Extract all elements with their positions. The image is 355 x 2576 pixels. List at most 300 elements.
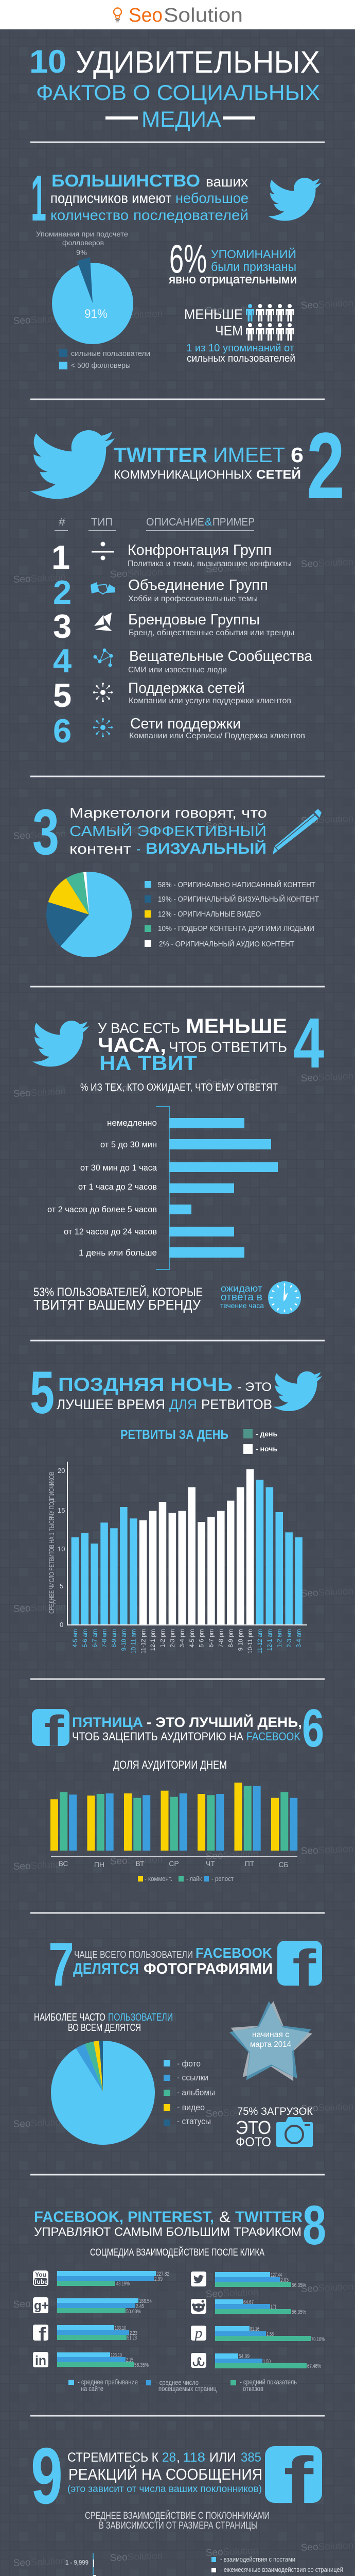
header logo band	[0, 0, 355, 29]
watermarks: SeoSolution	[13, 2117, 66, 2130]
number 9: 9	[31, 2431, 63, 2520]
row: twitter: 2.03	[280, 2277, 289, 2283]
pie legend: 19% - ОРИГИНАЛЬНЫЙ ВИЗУАЛЬНЫЙ КОНТЕНТ	[158, 894, 319, 904]
pie chart title	[36, 230, 128, 257]
icon: network	[94, 648, 113, 667]
title: МЕДИА	[141, 107, 221, 132]
row 3: Брендовые Группы	[128, 612, 260, 628]
icon: twitter bird	[273, 1371, 322, 1411]
row 3	[53, 607, 294, 645]
watermarks: SeoSolution	[300, 814, 354, 826]
bar chart: audience by weekday: СБ	[278, 1860, 289, 1869]
row: stumbleupon: 1.50	[263, 2359, 271, 2365]
heading: ЧТОБ ОТВЕТИТЬ	[169, 1039, 287, 1056]
pie legend: - ссылки	[177, 2073, 208, 2082]
bar chart: retweets by hour: 4-5 pm	[189, 1629, 196, 1648]
star badge	[228, 1999, 314, 2082]
row: reddit: 56.35%	[292, 2309, 306, 2315]
heading: &	[219, 2209, 230, 2226]
stat: 6%: явно отрицательными	[169, 273, 297, 286]
icon: youtube: You	[35, 2271, 46, 2278]
bar chart: retweets by hour: 3-4 pm	[180, 1629, 186, 1648]
heading: ЧАЩЕ ВСЕГО ПОЛЬЗОВАТЕЛИ	[74, 1950, 193, 1960]
pie legend: сильные пользователи	[71, 349, 150, 358]
icon: reddit	[191, 2299, 206, 2314]
bar chart: retweets by hour: 6-7 pm	[209, 1629, 215, 1648]
row 1: 1	[51, 538, 70, 576]
row: facebook: 51.28	[127, 2335, 137, 2341]
stat: fewer than 1 in 10: сильных пользователей	[187, 353, 295, 364]
watermarks: SeoSolution	[13, 2297, 66, 2310]
table header	[55, 516, 255, 531]
icon: logo bulb	[114, 8, 121, 22]
watermarks: SeoSolution	[110, 2551, 163, 2564]
icon: twitter bird	[32, 1021, 89, 1066]
heading: ваших	[206, 174, 248, 190]
icon: facebook small: f	[39, 2324, 46, 2345]
chart title: ДОЛЯ АУДИТОРИИ ДНЕМ	[113, 1758, 227, 1771]
watermarks: SeoSolution	[13, 2556, 66, 2569]
chart legend: - средний показатель	[240, 2378, 297, 2386]
section 3: visual content	[32, 796, 322, 957]
row 5: Поддержка сетей	[128, 680, 245, 697]
watermarks: SeoSolution	[205, 2287, 259, 2300]
icon: clock	[268, 1281, 301, 1314]
pie chart: content types	[46, 872, 132, 957]
stat: 75%: 75% ЗАГРУЗОК	[237, 2106, 313, 2117]
chart legend: - коммент.	[145, 1875, 172, 1883]
stat: 75%: ЭТО	[236, 2117, 271, 2138]
heading: - ЭТО ЛУЧШИЙ ДЕНЬ,	[147, 1714, 302, 1730]
watermarks: SeoSolution	[13, 572, 66, 585]
chart legend	[211, 2555, 343, 2573]
heading	[69, 805, 267, 857]
bar chart: retweets by hour: 20	[58, 1467, 65, 1475]
row: pinterest: 70.16%	[311, 2336, 325, 2343]
stat: 6%	[169, 236, 297, 286]
heading: FACEBOOK	[246, 1730, 300, 1743]
table header: ОПИСАНИЕ	[146, 516, 204, 528]
icon: facebook: f	[283, 2444, 314, 2517]
watermarks: SeoSolution	[300, 2102, 354, 2114]
bar chart: retweets by hour: 6-7 am	[92, 1629, 98, 1648]
row 5: 5	[53, 676, 72, 714]
heading: КОММУНИКАЦИОННЫХ	[114, 468, 252, 481]
title: УДИВИТЕЛЬНЫХ	[76, 45, 320, 79]
chart legend: на сайте	[81, 2384, 103, 2393]
chart legend	[138, 1875, 234, 1883]
chart legend: отказов	[243, 2384, 263, 2393]
icon: linkedin	[33, 2352, 48, 2368]
icon: pinterest small	[191, 2325, 206, 2342]
icon: youtube	[33, 2270, 48, 2286]
watermarks: SeoSolution	[300, 2282, 354, 2295]
heading: САМЫЙ ЭФФЕКТИВНЫЙ	[69, 822, 267, 840]
heading: У ВАС ЕСТЬ	[98, 1020, 180, 1036]
bar chart: expected reply time: от 5 до 30 мин	[100, 1140, 157, 1149]
bar chart: retweets by hour: 11-12 pm	[140, 1629, 147, 1654]
pie legend: 58% - ОРИГИНАЛЬНО НАПИСАННЫЙ КОНТЕНТ	[158, 880, 315, 889]
pie chart title: Упоминания при подсчете	[36, 230, 128, 238]
logo wordmark: Solution	[164, 5, 243, 26]
table header: ТИП	[91, 516, 113, 528]
watermarks: SeoSolution	[205, 1849, 259, 1862]
bar chart: expected reply time: немедленно	[107, 1118, 157, 1128]
heading: НА ТВИТ	[99, 1052, 197, 1075]
row 4	[53, 642, 313, 680]
heading	[67, 2450, 262, 2495]
pie title: ПОЛЬЗОВАТЕЛИ	[108, 2012, 173, 2023]
bar chart: audience by weekday: ВТ	[136, 1859, 145, 1868]
watermarks: SeoSolution	[205, 303, 259, 316]
bar chart: retweets by hour: 8-9 pm	[228, 1629, 234, 1648]
number 4: 4	[293, 1004, 324, 1083]
heading	[73, 1945, 273, 1977]
pie chart: mentions: 91%	[84, 307, 108, 321]
row: pinterest: 1.58	[267, 2331, 274, 2337]
pie legend	[59, 349, 150, 370]
stat: 53%	[33, 1283, 264, 1313]
heading: ЧАСА,	[98, 1034, 166, 1057]
chart legend: - взаимодействия с постами	[220, 2555, 295, 2563]
stat: fewer than 1 in 10: МЕНЬШЕ	[184, 307, 243, 322]
bar chart: engagement by page size	[41, 2553, 315, 2576]
bar chart: retweets by hour: СРЕДНЕЕ ЧИСЛО РЕТВИТОВ НА 1 ТЫСЯЧУ ПОДПИСЧИКОВ	[47, 1472, 56, 1614]
bar chart: retweets by hour: 1-2 am	[277, 1629, 283, 1648]
title	[29, 44, 320, 132]
stat: 6%: 6%	[169, 236, 207, 281]
heading: ФОТОГРАФИЯМИ	[144, 1960, 273, 1977]
stat: fewer than 1 in 10: 1 из 10 упоминаний от	[186, 343, 294, 354]
section 5: late night	[30, 1359, 322, 1654]
heading: количество	[50, 207, 129, 223]
watermarks: SeoSolution	[13, 1859, 66, 1872]
bar chart: retweets by hour: 2-3 am	[287, 1629, 293, 1648]
heading: FACEBOOK,	[34, 2209, 123, 2226]
icon: handshake	[91, 582, 115, 594]
bar chart: retweets by hour: 10	[58, 1545, 65, 1553]
heading: ПОЗДНЯЯ НОЧЬ	[58, 1374, 233, 1395]
bar chart: audience by weekday	[50, 1783, 297, 1869]
pie legend: - видео	[177, 2103, 205, 2112]
row: pinterest: 81.16	[250, 2326, 259, 2332]
chart title: СРЕДНЕЕ ВЗАИМОДЕЙСТВИЕ С ПОКЛОННИКАМИ	[85, 2510, 270, 2521]
icon: facebook: f	[292, 1939, 316, 1997]
heading: ,	[176, 2450, 180, 2465]
icon: facebook small	[33, 2324, 48, 2345]
row: google plus: 2.45	[136, 2303, 144, 2310]
bar chart: retweets by hour: 1-2 pm	[160, 1629, 166, 1648]
row 2	[53, 573, 268, 611]
icon: twitter bird	[268, 178, 321, 221]
heading: контент	[69, 841, 131, 857]
watermarks: SeoSolution	[110, 567, 163, 580]
row: linkedin: 56.35%	[134, 2362, 149, 2368]
watermarks: SeoSolution	[300, 557, 354, 570]
chart title: % ИЗ ТЕХ, КТО ОЖИДАЕТ, ЧТО ЕМУ ОТВЕТЯТ	[80, 1082, 278, 1093]
heading: PINTEREST,	[128, 2209, 214, 2226]
bar chart: audience by weekday: ЧТ	[206, 1859, 215, 1868]
watermarks: SeoSolution	[110, 309, 163, 321]
chart title	[85, 2510, 270, 2531]
row: facebook: 2.23	[130, 2330, 137, 2336]
icon: radial blue	[93, 718, 113, 737]
heading	[50, 171, 248, 223]
heading: 28	[162, 2450, 176, 2465]
icon: people	[246, 304, 294, 341]
watermarks: SeoSolution	[205, 1076, 259, 1089]
stat: 53%: течение часа	[220, 1301, 264, 1310]
icon: google plus: g+	[34, 2299, 49, 2313]
section 2: six networks	[30, 413, 345, 750]
stat: fewer than 1 in 10: ЧЕМ	[215, 323, 243, 338]
watermarks: SeoSolution	[13, 1087, 66, 1099]
heading: TWITTER	[235, 2209, 303, 2226]
heading: 385	[241, 2450, 261, 2465]
stat: 53%: 53% ПОЛЬЗОВАТЕЛЕЙ, КОТОРЫЕ	[33, 1285, 203, 1299]
bar chart: retweets by hour: 5-6 am	[82, 1629, 88, 1648]
heading: СЕТЕЙ	[256, 467, 301, 482]
chart title: РЕТВИТЫ ЗА ДЕНЬ	[120, 1428, 228, 1442]
row: stumbleupon: 54.09	[239, 2353, 250, 2360]
number 5: 5	[30, 1359, 55, 1426]
title: ФАКТОВ О СОЦИАЛЬНЫХ	[36, 80, 320, 105]
pie legend: 12% - ОРИГИНАЛЬНЫЕ ВИДЕО	[158, 910, 261, 919]
title: 10	[29, 44, 66, 80]
row 2: Хобби и профессиональные темы	[128, 595, 258, 603]
stat: 53%: ответа в	[221, 1292, 262, 1303]
pie legend: < 500 фолловеры	[71, 361, 131, 370]
bar chart: retweets by hour: 10-11 pm	[247, 1629, 254, 1654]
watermarks: SeoSolution	[300, 298, 354, 311]
heading: ДЕЛЯТСЯ	[73, 1960, 139, 1977]
row 5	[53, 676, 291, 714]
bar chart: expected reply time: от 12 часов до 24 часов	[64, 1227, 157, 1236]
heading: TWITTER	[114, 443, 207, 467]
stat: 75%: ФОТО	[236, 2135, 271, 2149]
bar chart: engagement by page size: 1 - 9,999	[65, 2558, 88, 2566]
row 1: Конфронтация Групп	[128, 542, 272, 558]
heading: ПЯТНИЦА	[72, 1715, 143, 1730]
row: twitter: 56.35%	[292, 2282, 306, 2289]
watermarks: SeoSolution	[205, 2107, 259, 2120]
row 6: Компании или Сервисы/ Поддержка клиентов	[129, 732, 305, 740]
row: google plus	[33, 2297, 152, 2315]
logo wordmark: Seo	[129, 5, 163, 26]
chart legend: - ночь	[256, 1445, 277, 1453]
bar chart: retweets by hour: 9-10 pm	[238, 1629, 244, 1651]
row 6: Сети поддержки	[130, 716, 241, 732]
icon: linkedin: in	[35, 2353, 46, 2368]
row 2: Объединение Групп	[128, 577, 268, 594]
heading: 118	[183, 2450, 205, 2465]
heading: (это зависит от числа ваших поклонников)	[67, 2484, 262, 2495]
heading: последователей	[133, 207, 248, 223]
bar chart: retweets by hour: 12-1 am	[267, 1629, 273, 1651]
icon: radial	[93, 683, 113, 702]
pie title: ВО ВСЕМ ДЕЛЯТСЯ	[68, 2022, 141, 2033]
bar chart: retweets by hour: 2-3 pm	[170, 1629, 176, 1648]
pie title	[34, 2012, 173, 2033]
row 1	[51, 538, 292, 576]
watermarks: SeoSolution	[300, 1586, 354, 1599]
bar chart: retweets by hour: 7-8 am	[102, 1629, 108, 1648]
chart legend: - день	[256, 1430, 277, 1438]
watermarks: SeoSolution	[300, 2540, 354, 2553]
bar chart: retweets by hour: 8-9 am	[112, 1629, 118, 1648]
heading: ИМЕЕТ	[213, 443, 285, 467]
heading: Маркетологи говорят, что	[69, 805, 267, 821]
table header: &	[205, 516, 212, 528]
heading: - ЭТО	[237, 1380, 272, 1394]
watermarks: SeoSolution	[110, 1081, 163, 1094]
watermarks: SeoSolution	[13, 829, 66, 842]
heading	[34, 2209, 303, 2239]
bar chart: retweets by hour: 15	[58, 1506, 65, 1514]
stat: 75%	[236, 2106, 313, 2149]
pie chart: shared content	[51, 2041, 155, 2145]
row: facebook: 133.10	[115, 2325, 126, 2331]
bar chart: retweets by hour: 4-5 am	[73, 1629, 79, 1648]
row: linkedin: 123.10	[111, 2352, 122, 2359]
chart legend: - среднее пребывание	[78, 2378, 138, 2386]
pie legend: 10% - ПОДБОР КОНТЕНТА ДРУГИМИ ЛЮДЬМИ	[158, 924, 314, 933]
row: youtube: 43.19%	[116, 2281, 130, 2287]
bar chart: retweets by hour: 5	[60, 1582, 63, 1590]
chart title: В ЗАВИСИМОСТИ ОТ РАЗМЕРА СТРАНИЦЫ	[99, 2520, 258, 2531]
icon: youtube: Tube	[33, 2278, 48, 2285]
section 7: photos	[34, 1930, 322, 2149]
bar chart: retweets by hour: 0	[60, 1621, 63, 1629]
logo wordmark	[129, 5, 243, 26]
row 5: Компании или услуги поддержки клиентов	[129, 697, 291, 705]
heading	[57, 1374, 272, 1412]
bar chart: retweets by hour: 3-4 am	[296, 1629, 303, 1648]
watermarks: SeoSolution	[205, 819, 259, 832]
bar chart: expected reply time: от 1 часа до 2 часов	[78, 1182, 157, 1192]
icon: facebook	[32, 1709, 69, 1746]
watermarks: SeoSolution	[13, 1602, 66, 1615]
bar chart: retweets by hour: 5-6 pm	[199, 1629, 205, 1648]
icon: triangles	[94, 613, 112, 631]
number 3: 3	[32, 796, 59, 868]
row: youtube: 2.99	[154, 2276, 163, 2282]
icon: camera	[276, 2117, 313, 2147]
row 4: СМИ или известные люди	[128, 666, 227, 674]
chart legend	[243, 1429, 277, 1454]
heading: МЕНЬШЕ	[186, 1015, 287, 1038]
stat: 53%: ТВИТЯТ ВАШЕМУ БРЕНДУ	[33, 1297, 201, 1313]
bar chart: expected reply time: от 2 часов до более 5 часов	[47, 1205, 157, 1214]
icon: twitter small	[191, 2272, 206, 2286]
bar chart: retweets by hour	[47, 1462, 307, 1654]
heading: РЕАКЦИЙ НА СООБЩЕНИЯ	[68, 2465, 262, 2483]
watermarks: SeoSolution	[300, 1071, 354, 1084]
bar chart: retweets by hour: 7-8 pm	[218, 1629, 224, 1648]
heading: 6	[291, 443, 304, 467]
pie legend: - альбомы	[177, 2088, 215, 2097]
row: reddit: 64.67	[243, 2299, 254, 2306]
icon: twitter bird large	[30, 430, 115, 499]
row 4: 4	[53, 642, 72, 680]
chart legend: посещаемых страниц	[158, 2384, 217, 2393]
pie title: НАИБОЛЕЕ ЧАСТО	[34, 2012, 105, 2023]
icon: facebook: f	[44, 1707, 64, 1755]
row: twitter	[191, 2272, 306, 2289]
row 1: Политика и темы, вызывающие конфликты	[128, 560, 292, 568]
watermarks: SeoSolution	[110, 824, 163, 837]
bar chart: expected reply time	[47, 1107, 278, 1269]
chart legend	[68, 2378, 297, 2393]
heading: БОЛЬШИНСТВО	[51, 171, 200, 190]
row: youtube: 227.82	[156, 2271, 169, 2277]
pie chart title: 9%	[76, 248, 87, 257]
row: linkedin	[33, 2352, 149, 2368]
heading	[98, 1015, 287, 1075]
heading: УПРАВЛЯЮТ САМЫМ БОЛЬШИМ ТРАФИКОМ	[34, 2225, 301, 2239]
pie legend: - статусы	[177, 2116, 211, 2126]
row 3: 3	[53, 607, 72, 645]
bar chart: retweets by hour: 12-1 pm	[150, 1629, 156, 1651]
section 9: reactions	[33, 2446, 343, 2576]
number 6: 6	[302, 1699, 324, 1758]
section 1: most followers	[31, 162, 321, 370]
heading: -	[136, 841, 140, 857]
star badge: начиная с	[252, 2030, 289, 2039]
heading: ДЛЯ	[169, 1397, 197, 1412]
icon: facebook	[277, 1941, 322, 1986]
bar chart: audience by weekday: ПН	[94, 1860, 104, 1869]
bar chart: retweets by hour: 10-11 am	[131, 1629, 137, 1654]
watermarks: SeoSolution	[205, 2546, 259, 2558]
table header: #	[59, 516, 65, 528]
row: pinterest	[191, 2325, 325, 2343]
icon: divide	[92, 542, 114, 561]
number 7: 7	[48, 1930, 74, 1999]
heading: РЕТВИТОВ	[201, 1397, 272, 1412]
heading: ЛУЧШЕЕ ВРЕМЯ	[57, 1397, 165, 1412]
row: reddit	[191, 2299, 306, 2315]
heading: подписчиков имеют	[50, 190, 171, 206]
row: twitter: 127.44	[271, 2272, 282, 2278]
pie legend	[145, 880, 319, 948]
row: reddit: 1.71	[271, 2304, 276, 2310]
heading	[72, 1714, 302, 1743]
icon: pinterest small: p	[193, 2325, 203, 2342]
row 6: 6	[53, 712, 72, 750]
bar chart: expected reply time: от 30 мин до 1 часа	[80, 1163, 157, 1173]
pie chart: mentions	[52, 257, 133, 344]
row 4: Вещательные Сообщества	[129, 648, 313, 665]
watermarks: SeoSolution	[205, 562, 259, 575]
section 4: reply within the hour	[32, 1004, 324, 1314]
row: facebook	[33, 2324, 137, 2345]
bar chart: audience by weekday: СР	[169, 1859, 179, 1868]
row: google plus: 50.63%	[126, 2309, 141, 2315]
icon: pencil	[273, 809, 322, 855]
heading: ИЛИ	[209, 2450, 236, 2465]
icon: facebook	[265, 2446, 322, 2503]
stat: 6%: были признаны	[211, 260, 296, 274]
row 2: 2	[53, 573, 72, 611]
number 8: 8	[303, 2194, 326, 2256]
row 3: Бренд, общественные события или тренды	[129, 629, 294, 637]
heading: ВИЗУАЛЬНЫЙ	[146, 840, 267, 857]
heading	[114, 443, 304, 482]
heading: ЧТОБ ЗАЦЕПИТЬ АУДИТОРИЮ НА	[72, 1730, 243, 1743]
chart title: СОЦМЕДИА ВЗАИМОДЕЙСТВИЕ ПОСЛЕ КЛИКА	[90, 2247, 264, 2258]
section 8: traffic	[33, 2194, 326, 2393]
